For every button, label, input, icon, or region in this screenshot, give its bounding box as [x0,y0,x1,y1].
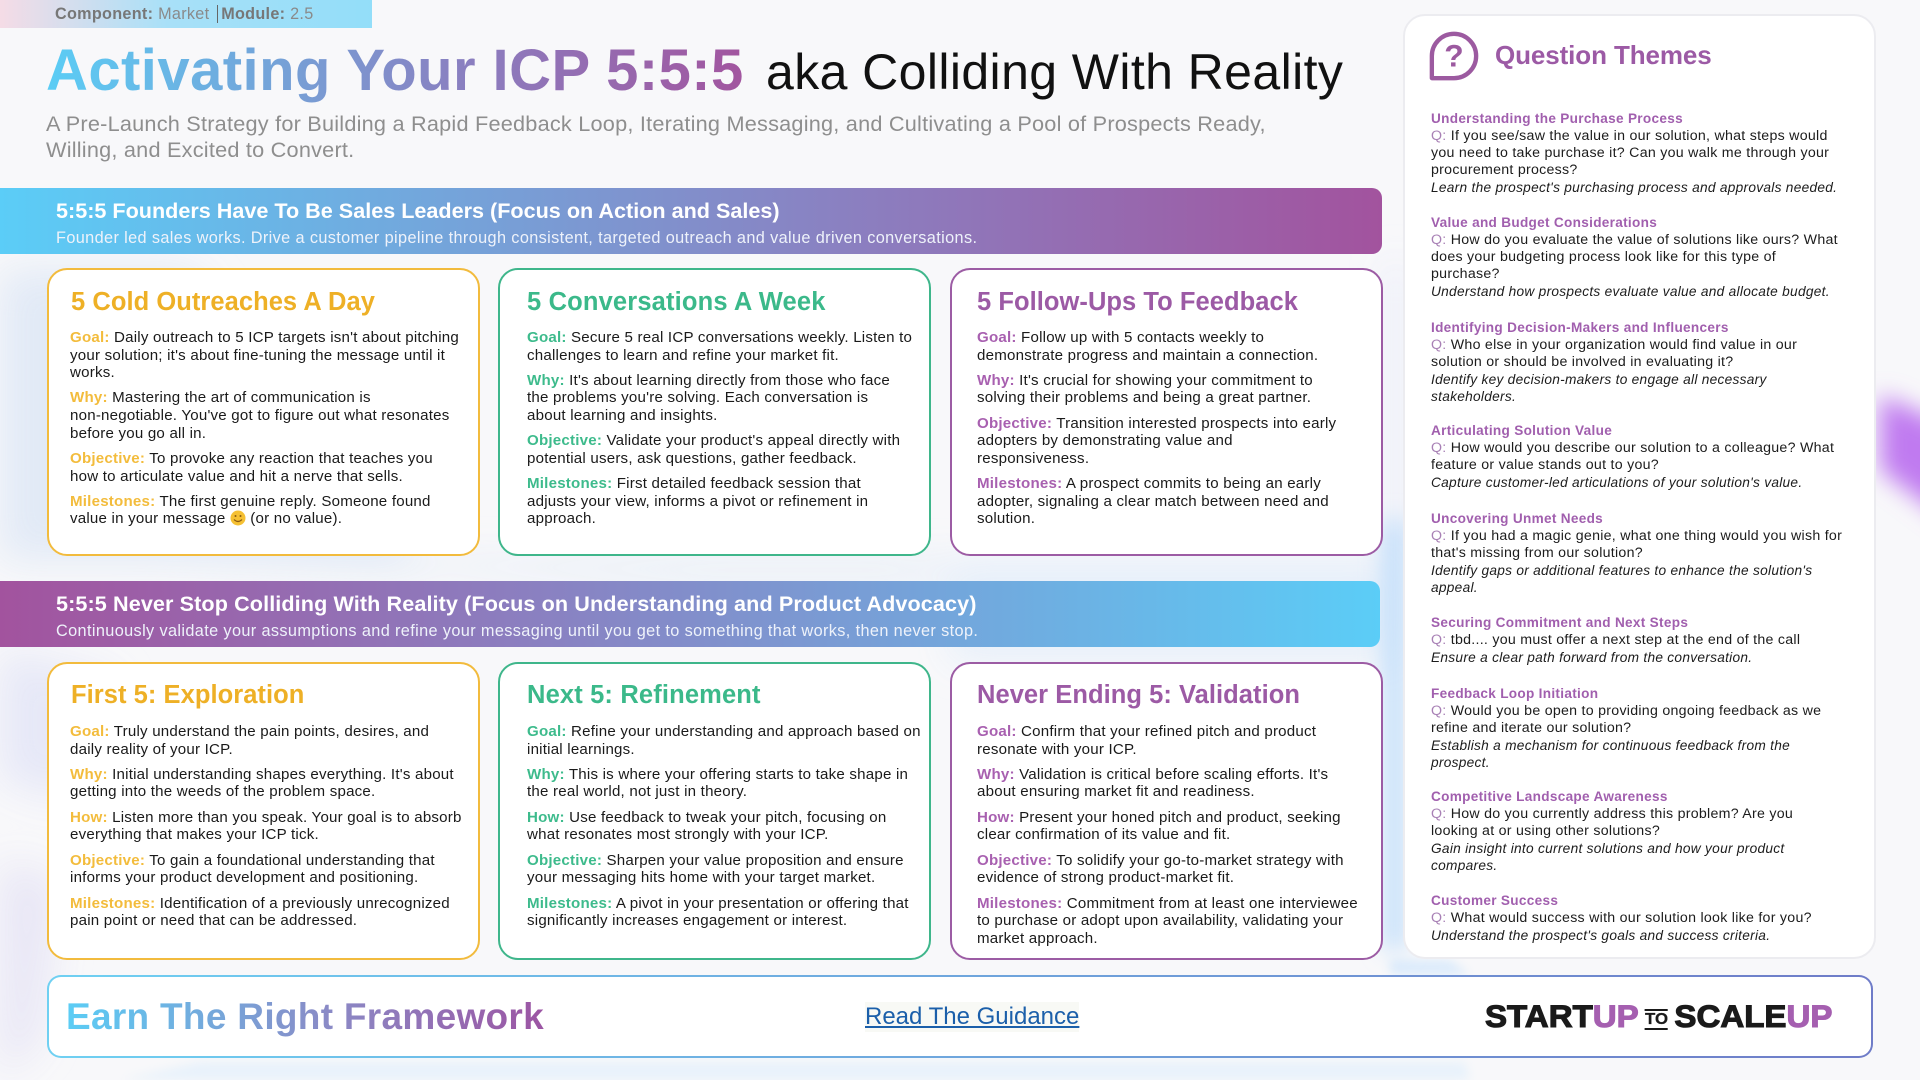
card: next 5: Objective: Sharpen your value proposition and ensure [527,852,904,869]
theme: value and budget: Q: How do you evaluate the value of solutions like ours? What [1431,232,1838,248]
component tag [0,0,372,28]
theme: unmet needs: Identify gaps or additional features to enhance the solution's [1431,563,1812,578]
card: next 5: How: Use feedback to tweak your pitch, focusing on [527,809,887,826]
card: first 5: Objective: To gain a foundational understanding that [70,852,435,869]
theme: solution value: Q: How would you describe our solution to a colleague? What [1431,440,1834,456]
card: next 5: initial learnings. [527,741,635,758]
theme: competitive landscape: compares. [1431,858,1497,873]
card: 5 follow-ups: adopters by demonstrating value and [977,432,1233,449]
card: first 5: informs your product development and positioning. [70,869,418,886]
card: never ending 5 [950,662,1383,960]
card: 5 cold outreaches: value in your message (or no value). [70,510,342,527]
card: 5 conversations: approach. [527,510,596,527]
card: next 5: Milestones: A pivot in your presentation or offering that [527,894,909,912]
theme: competitive landscape [1431,789,1793,873]
theme: commitment [1431,614,1800,665]
theme: value and budget [1431,215,1838,299]
theme: feedback loop: prospect. [1431,754,1490,770]
card: first 5: First 5: Exploration [71,681,304,709]
banner: colliding with reality: 5:5:5 Never Stop Colliding With Reality (Focus on Understanding and Product Advocacy) [56,591,977,616]
theme: competitive landscape: looking at or using other solutions? [1431,823,1660,839]
card: never ending 5: resonate with your ICP. [977,741,1137,758]
card: 5 conversations: 5 Conversations A Week [527,288,826,316]
card: first 5 [47,662,480,960]
card: never ending 5: market approach. [977,930,1098,947]
card: 5 follow-ups: solution. [977,510,1035,527]
theme: feedback loop: Establish a mechanism for continuous feedback from the [1431,738,1790,752]
theme: feedback loop: Feedback Loop Initiation [1431,686,1598,700]
subtitle: A Pre-Launch Strategy for Building a Rapid Feedback Loop, Iterating Messaging, and Cultivating a Pool of Prospects Ready, [46,111,1266,136]
logo: STARTUP SCALEUP [1485,998,1832,1034]
theme: competitive landscape: Q: How do you currently address this problem? Are you [1431,806,1793,822]
subtitle: Willing, and Excited to Convert. [46,137,354,162]
card: first 5: Why: Initial understanding shapes everything. It's about [70,766,454,783]
card: 5 follow-ups: Objective: Transition interested prospects into early [977,415,1336,432]
theme: purchase process: Learn the prospect's purchasing process and approvals needed. [1431,180,1837,194]
card: 5 follow-ups: adopter, signaling a clear match between need and [977,493,1329,510]
theme: unmet needs: Uncovering Unmet Needs [1431,511,1603,526]
card: never ending 5: How: Present your honed pitch and product, seeking [977,809,1341,826]
card: 5 conversations: the problems you're solving. Each conversation is [527,389,868,406]
card: never ending 5: clear confirmation of its value and fit. [977,826,1230,843]
card: 5 conversations: Milestones: First detailed feedback session that [527,475,861,492]
title aside: aka Colliding With Reality [766,44,1343,100]
guidance link: Read The Guidance [865,1003,1079,1030]
card: 5 follow-ups: Why: It's crucial for showing your commitment to [977,372,1313,389]
card: first 5: everything that makes your ICP tick. [70,826,319,843]
theme: unmet needs: appeal. [1431,580,1478,595]
theme: value and budget: purchase? [1431,266,1500,282]
component tag: Component: Market Module: 2.5 [55,5,314,23]
card: 5 conversations: about learning and insights. [527,407,718,424]
banner: colliding with reality: Continuously validate your assumptions and refine your messaging until you get to something that works, then never stop. [56,622,978,640]
theme: solution value: feature or value stands out to you? [1431,457,1659,473]
card: 5 conversations [498,268,931,556]
card: next 5: Why: This is where your offering starts to take shape in [527,766,908,783]
card: never ending 5: evidence of strong product-market fit. [977,869,1234,886]
panel: question themes [1403,14,1876,959]
card: next 5: Goal: Refine your understanding and approach based on [527,723,921,740]
theme: solution value: Capture customer-led articulations of your solution's value. [1431,475,1802,490]
banner: founders: 5:5:5 Founders Have To Be Sales Leaders (Focus on Action and Sales) [56,198,780,223]
card: never ending 5: Never Ending 5: Validation [977,681,1300,709]
card: 5 cold outreaches: Goal: Daily outreach to 5 ICP targets isn't about pitching [70,329,459,346]
card: first 5: pain point or need that can be addressed. [70,912,357,929]
card: never ending 5: to purchase or adopt upon availability, validating your [977,912,1343,929]
icon: question bubble [1430,32,1478,80]
theme: commitment: Securing Commitment and Next Steps [1431,614,1688,630]
card: next 5: your messaging hits home with your target market. [527,869,875,886]
theme: feedback loop: Q: Would you be open to providing ongoing feedback as we [1431,702,1821,718]
theme: solution value [1431,423,1834,490]
card: first 5: daily reality of your ICP. [70,741,233,758]
theme: value and budget: Understand how prospects evaluate value and allocate budget. [1431,284,1830,299]
theme: purchase process: Understanding the Purchase Process [1431,110,1683,126]
theme: commitment: Ensure a clear path forward from the conversation. [1431,650,1752,664]
card: 5 cold outreaches: Objective: To provoke any reaction that teaches you [70,450,433,467]
theme: decision makers: Identifying Decision-Makers and Influencers [1431,320,1729,334]
card: 5 cold outreaches: works. [70,364,115,381]
card: next 5: the real world, not just in theory. [527,783,747,800]
card: 5 cold outreaches: Why: Mastering the art of communication is [70,389,371,406]
card: 5 cold outreaches: non-negotiable. You've got to figure out what resonates [70,407,449,424]
theme: feedback loop [1430,686,1821,770]
card: first 5: Milestones: Identification of a previously unrecognized [70,894,450,912]
theme: decision makers: solution or should be involved in evaluating it? [1431,354,1733,370]
card: 5 cold outreaches [47,268,480,556]
theme: unmet needs: Q: If you had a magic genie, what one thing would you wish for [1431,528,1842,544]
title: Activating Your ICP 5:5:5 [46,38,744,103]
theme: customer success: Customer Success [1431,893,1558,908]
footer bar [47,975,1873,1058]
card: never ending 5: Why: Validation is critical before scaling efforts. It's [977,766,1328,783]
theme: value and budget: does your budgeting process look like for this type of [1431,249,1776,265]
theme: decision makers: stakeholders. [1431,388,1516,404]
subtitle [46,111,1266,162]
card: 5 conversations: potential users, ask questions, gather feedback. [527,450,857,467]
theme: unmet needs: that's missing from our solution? [1431,545,1643,561]
theme: purchase process: you need to take purchase it? Can you walk me through your [1431,144,1829,160]
card: never ending 5: Objective: To solidify your go-to-market strategy with [977,852,1344,869]
card: never ending 5: Goal: Confirm that your refined pitch and product [977,723,1316,740]
theme: purchase process: Q: If you see/saw the value in our solution, what steps would [1431,128,1828,144]
card: 5 follow-ups: Goal: Follow up with 5 contacts weekly to [977,329,1264,346]
heading: question themes: Question Themes [1495,40,1712,70]
card: 5 follow-ups: responsiveness. [977,450,1089,467]
card: 5 conversations: challenges to learn and refine your market fit. [527,347,839,364]
theme: competitive landscape: Gain insight into current solutions and how your product [1431,841,1784,856]
card: 5 conversations: Goal: Secure 5 real ICP conversations weekly. Listen to [527,329,912,346]
theme: unmet needs [1431,511,1842,595]
card: 5 follow-ups [950,268,1383,556]
logo: TO [1645,1011,1668,1028]
card: 5 conversations: Objective: Validate your product's appeal directly with [527,432,900,449]
theme: competitive landscape: Competitive Landscape Awareness [1431,789,1668,804]
card: 5 cold outreaches: your solution; it's about fine-tuning the message until it [70,347,445,364]
banner: founders [0,188,1382,254]
theme: customer success: Understand the prospect's goals and success criteria. [1431,928,1770,943]
card: next 5: significantly increases engagement or interest. [527,912,847,929]
theme: purchase process [1431,110,1837,195]
theme: value and budget: Value and Budget Considerations [1431,215,1657,230]
card: 5 cold outreaches: before you go all in. [70,425,206,442]
card: next 5 [498,662,931,960]
theme: decision makers [1431,320,1797,404]
card: 5 cold outreaches: 5 Cold Outreaches A Day [71,288,375,316]
card: 5 conversations: adjusts your view, informs a pivot or refinement in [527,493,868,510]
card: first 5: getting into the weeds of the problem space. [70,783,375,800]
card: first 5: Goal: Truly understand the pain points, desires, and [70,723,429,740]
theme: feedback loop: refine and iterate our solution? [1431,720,1631,736]
banner: founders: Founder led sales works. Drive a customer pipeline through consistent, targeted outreach and value driven conversations. [56,229,977,247]
theme: decision makers: Identify key decision-makers to engage all necessary [1431,372,1767,386]
footer title: Earn The Right Framework [66,996,544,1037]
theme: commitment: Q: tbd.... you must offer a next step at the end of the call [1431,632,1800,648]
card: never ending 5: about ensuring market fit and readiness. [977,783,1255,800]
banner: colliding with reality [0,581,1380,647]
theme: purchase process: procurement process? [1431,162,1578,178]
card: 5 follow-ups: solving their problems and being a great partner. [977,389,1311,406]
card: 5 follow-ups: demonstrate progress and maintain a connection. [977,347,1318,364]
card: 5 cold outreaches: Milestones: The first genuine reply. Someone found [70,493,431,510]
card: first 5: How: Listen more than you speak. Your goal is to absorb [70,809,462,826]
theme: customer success: Q: What would success with our solution look like for you? [1431,910,1812,926]
theme: solution value: Articulating Solution Value [1431,423,1612,438]
card: next 5: Next 5: Refinement [527,681,761,709]
card: 5 cold outreaches: how to articulate value and hit a nerve that sells. [70,468,403,485]
card: 5 follow-ups: 5 Follow-Ups To Feedback [977,288,1298,316]
card: never ending 5: Milestones: Commitment from at least one interviewee [977,894,1358,912]
theme: customer success [1431,893,1812,943]
icon: question bubble: ? [1444,38,1464,74]
card: next 5: what resonates most strongly with your ICP. [527,826,829,843]
card: 5 conversations: Why: It's about learning directly from those who face [527,372,890,389]
card: 5 follow-ups: Milestones: A prospect commits to being an early [977,475,1321,492]
theme: decision makers: Q: Who else in your organization would find value in our [1431,336,1797,352]
